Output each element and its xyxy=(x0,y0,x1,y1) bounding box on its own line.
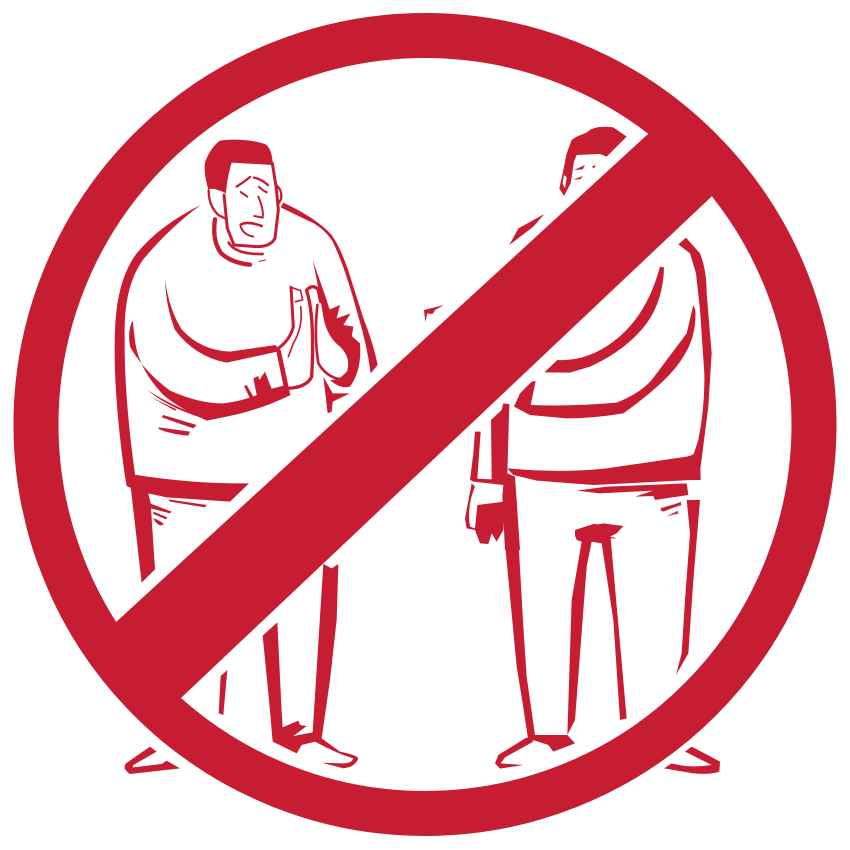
upper body of right man xyxy=(424,127,712,550)
figure: man seen from behind on the right xyxy=(424,127,720,774)
upper body of left man xyxy=(115,140,378,510)
figure: pleading man on the left xyxy=(115,140,378,774)
legs and shoes of right man xyxy=(495,500,720,774)
diagonal bar xyxy=(88,110,736,722)
legs and shoes of left man xyxy=(125,487,358,774)
